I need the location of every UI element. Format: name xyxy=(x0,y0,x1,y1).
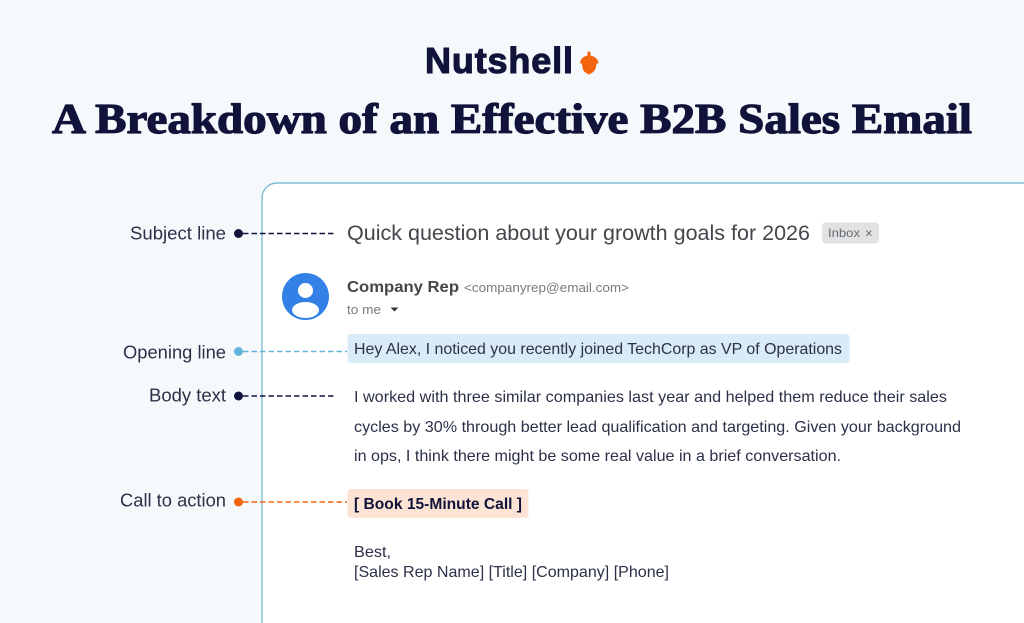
callout: call to action: Call to action xyxy=(120,490,226,510)
inbox tag: Inbox xyxy=(828,226,860,240)
title: A Breakdown of an Effective B2B Sales Email xyxy=(52,97,972,143)
body text: cycles by 30% through better lead qualification and targeting. Given your background xyxy=(354,419,961,436)
signature: [Sales Rep Name] [Title] [Company] [Phone] xyxy=(354,564,669,581)
icon: sender avatar xyxy=(282,273,329,320)
logo: Nutshell: Nutshell xyxy=(425,40,573,81)
opening line highlight: Hey Alex, I noticed you recently joined TechCorp as VP of Operations xyxy=(354,341,842,358)
callout: subject line: Subject line xyxy=(130,224,226,244)
sender name: Company Rep xyxy=(347,279,459,296)
signature xyxy=(354,544,669,581)
opening line highlight xyxy=(348,334,850,363)
callout: opening line xyxy=(123,342,347,362)
sender email: <companyrep@email.com> xyxy=(464,280,629,295)
call to action button xyxy=(348,489,528,518)
callout: body text xyxy=(149,386,334,406)
inbox tag xyxy=(822,222,879,244)
recipient: to me xyxy=(347,302,381,317)
callout: subject line xyxy=(130,224,334,244)
call to action button: [ Book 15-Minute Call ] xyxy=(354,496,522,513)
inbox tag: × xyxy=(865,226,873,240)
callout: opening line: Opening line xyxy=(123,342,226,362)
body text: in ops, I think there might be some real value in a brief conversation. xyxy=(354,448,841,465)
panel: email card xyxy=(262,183,1024,623)
signature: Best, xyxy=(354,544,391,561)
icon: acorn xyxy=(580,52,598,74)
subject line text: Quick question about your growth goals for 2026 xyxy=(347,222,810,245)
callout: body text: Body text xyxy=(149,386,226,406)
icon: dropdown arrow xyxy=(390,308,398,312)
body text xyxy=(354,389,961,465)
body text: I worked with three similar companies last year and helped them reduce their sales xyxy=(354,389,947,406)
callout: call to action xyxy=(120,490,347,510)
